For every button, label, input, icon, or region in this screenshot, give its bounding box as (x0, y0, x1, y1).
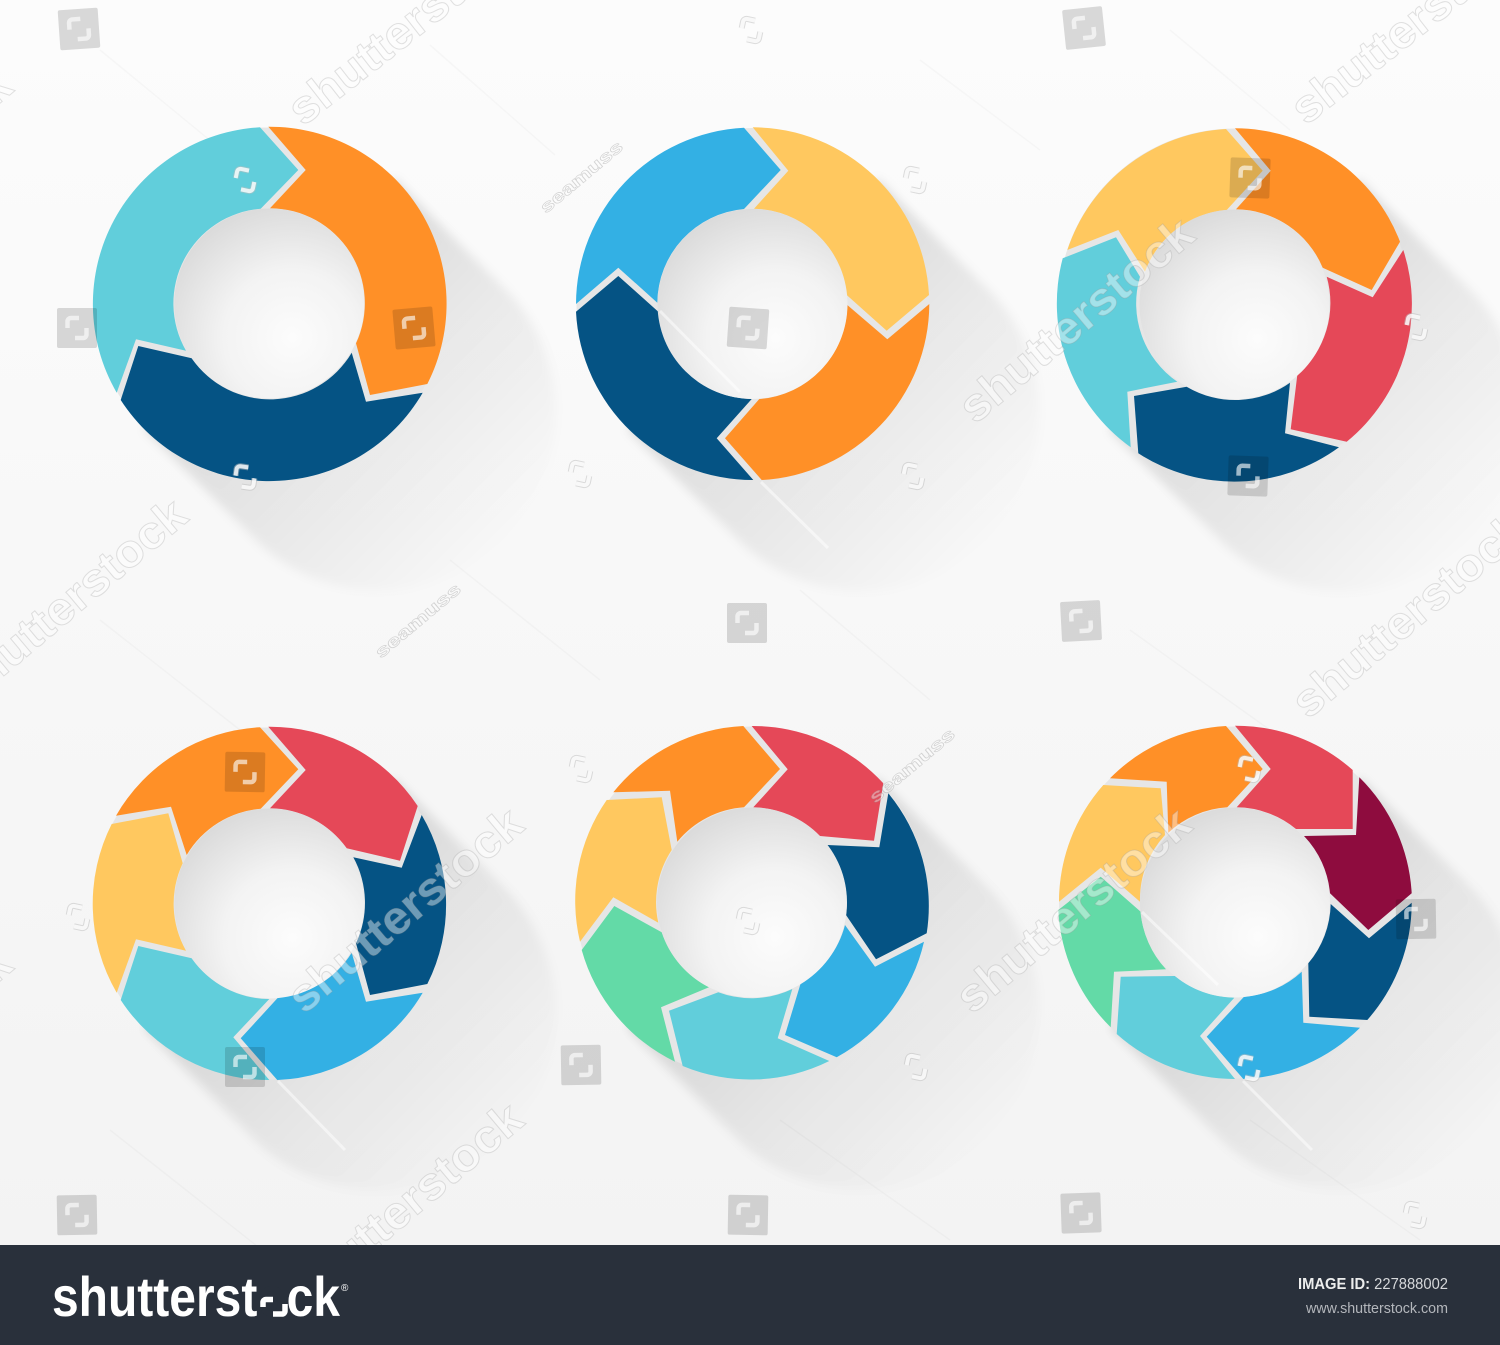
arrow: yellow (1067, 129, 1263, 272)
arrow: navy (576, 276, 753, 480)
centre hole (658, 209, 848, 399)
arrow: green (1058, 877, 1166, 1027)
arrow: navy (353, 815, 446, 995)
arrow: orange (1235, 128, 1400, 290)
ring: six arrows (93, 727, 556, 1190)
centre hole (1140, 808, 1330, 998)
arrow: teal (1117, 976, 1235, 1079)
arrow: orange (116, 727, 298, 855)
watermark text: shutterstock: shutterstock (948, 206, 1204, 433)
watermark text: seamuss: seamuss (865, 724, 959, 807)
arrow: navy (827, 793, 929, 959)
arrow: orange (268, 127, 447, 395)
footer bar (0, 1245, 1500, 1345)
ring: eight arrows (1058, 726, 1500, 1189)
watermark text: seamuss: seamuss (371, 579, 465, 662)
arrow: blue (785, 925, 924, 1057)
long shadow (144, 778, 556, 1190)
arrow: navy (1308, 903, 1412, 1020)
arrow: red (1235, 726, 1353, 829)
arrow: green (582, 906, 709, 1062)
arrow: navy (1134, 383, 1339, 482)
image id: IMAGE ID: 227888002 (1298, 1276, 1448, 1293)
long shadow (628, 179, 1039, 591)
arrow: blue (241, 953, 423, 1080)
arrow: teal (1057, 237, 1177, 447)
watermark text: seamuss: seamuss (536, 137, 627, 217)
watermark text: shutterstock: shutterstock (277, 1091, 533, 1318)
arrow: red (268, 727, 418, 861)
arrow: teal (669, 989, 829, 1080)
arrow: blue (1207, 972, 1360, 1079)
arrow: red (1291, 250, 1412, 442)
website: www.shutterstock.com (1305, 1300, 1448, 1317)
ring: five arrows, yellow orange red navy teal (1057, 128, 1500, 591)
arrow: navy (121, 346, 423, 481)
separator ring (576, 128, 928, 480)
footer logo: shutterstock (52, 1265, 341, 1328)
arrow: yellow (753, 127, 929, 331)
arrow: yellow (93, 813, 186, 993)
footer logo: ® (341, 1283, 349, 1294)
arrow: teal (121, 946, 269, 1080)
arrow: orange (1110, 726, 1263, 833)
arrow: teal (93, 127, 298, 393)
arrow: yellow (575, 797, 672, 942)
arrow: maroon (1304, 777, 1412, 930)
centre hole (174, 808, 364, 998)
arrow: orange (725, 304, 929, 480)
long shadow (144, 178, 556, 590)
long shadow (1110, 180, 1500, 591)
arrow: red (752, 726, 883, 841)
long shadow (1110, 778, 1500, 1189)
separator ring (93, 128, 445, 480)
ring: four arrows, blue yellow orange navy (576, 127, 1039, 591)
arrow: blue (576, 128, 781, 304)
arrow: yellow (1059, 785, 1165, 902)
long shadow (627, 778, 1039, 1189)
separator ring (576, 726, 928, 1078)
centre hole (657, 808, 847, 998)
arrow: orange (613, 726, 780, 842)
ring: three arrows, teal orange navy (93, 127, 556, 590)
watermark text: seamuss (371, 137, 959, 807)
centre hole (1140, 210, 1330, 400)
watermark text: shutterstock: shutterstock (277, 796, 533, 1023)
separator ring (1059, 726, 1411, 1078)
watermark text: shutterstock: shutterstock (945, 796, 1201, 1023)
separator ring (1058, 128, 1410, 480)
centre hole (174, 208, 364, 398)
separator ring (93, 728, 445, 1080)
ring: seven arrows (575, 726, 1039, 1189)
